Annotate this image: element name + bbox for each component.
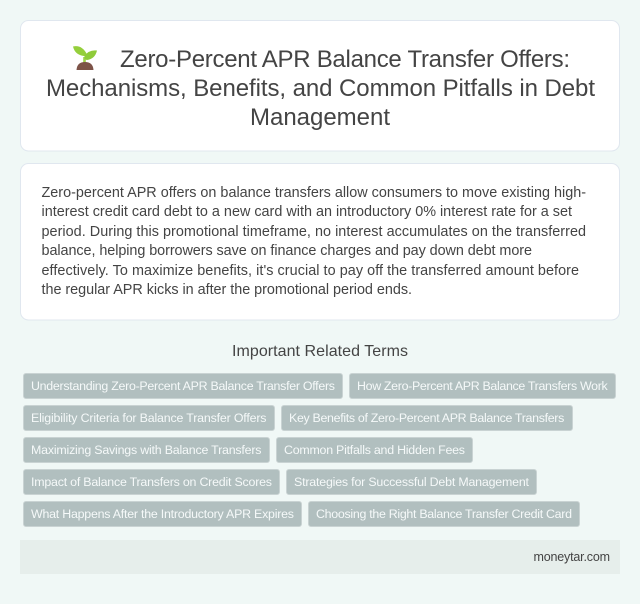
tag: Impact of Balance Transfers on Credit Scores xyxy=(31,475,272,489)
footer source: moneytar.com xyxy=(534,550,610,564)
title: Zero-Percent APR Balance Transfer Offers: xyxy=(120,46,570,73)
panel: related term tags xyxy=(24,374,616,526)
text block: description xyxy=(42,185,586,298)
tag xyxy=(282,406,572,430)
tag: What Happens After the Introductory APR Expires xyxy=(31,507,294,521)
tag xyxy=(24,438,270,462)
tag xyxy=(308,502,580,526)
tag: Choosing the Right Balance Transfer Credit Card xyxy=(316,507,572,521)
heading: related terms: Important Related Terms xyxy=(232,343,408,360)
tag: How Zero-Percent APR Balance Transfers Work xyxy=(357,379,608,393)
title: Mechanisms, Benefits, and Common Pitfalls in Debt xyxy=(46,75,595,102)
text block: description: period. During this promotional timeframe, no interest accumulates on the transferred xyxy=(42,224,586,240)
title xyxy=(46,46,595,131)
text block: description: effectively. To maximize benefits, it's crucial to pay off the transferred amount before xyxy=(42,263,579,279)
tag: Maximizing Savings with Balance Transfers xyxy=(31,443,262,457)
tag: Understanding Zero-Percent APR Balance Transfer Offers xyxy=(31,379,335,393)
footer bar xyxy=(20,540,620,574)
text block: description: balance, helping borrowers save on finance charges and pay down debt more xyxy=(42,243,532,259)
tag: Strategies for Successful Debt Management xyxy=(294,475,530,489)
tag xyxy=(24,470,280,494)
tag xyxy=(350,374,616,398)
text block: description: Zero-percent APR offers on balance transfers allow consumers to move existing high- xyxy=(42,185,586,201)
tag xyxy=(286,470,536,494)
tag xyxy=(24,502,302,526)
icon: sprout xyxy=(73,46,97,70)
tag xyxy=(24,374,342,398)
tag xyxy=(276,438,472,462)
title: Management xyxy=(250,104,390,131)
tag: Key Benefits of Zero-Percent APR Balance Transfers xyxy=(289,411,564,425)
panel: description card xyxy=(20,164,620,320)
panel: title card xyxy=(20,20,620,151)
tag: Common Pitfalls and Hidden Fees xyxy=(284,443,465,457)
text block: description: interest credit card debt to a new card with an introductory 0% interest rate for a set xyxy=(42,204,572,220)
tag xyxy=(24,406,274,430)
tag: Eligibility Criteria for Balance Transfer Offers xyxy=(31,411,266,425)
text block: description: the regular APR kicks in after the promotional period ends. xyxy=(42,282,412,298)
